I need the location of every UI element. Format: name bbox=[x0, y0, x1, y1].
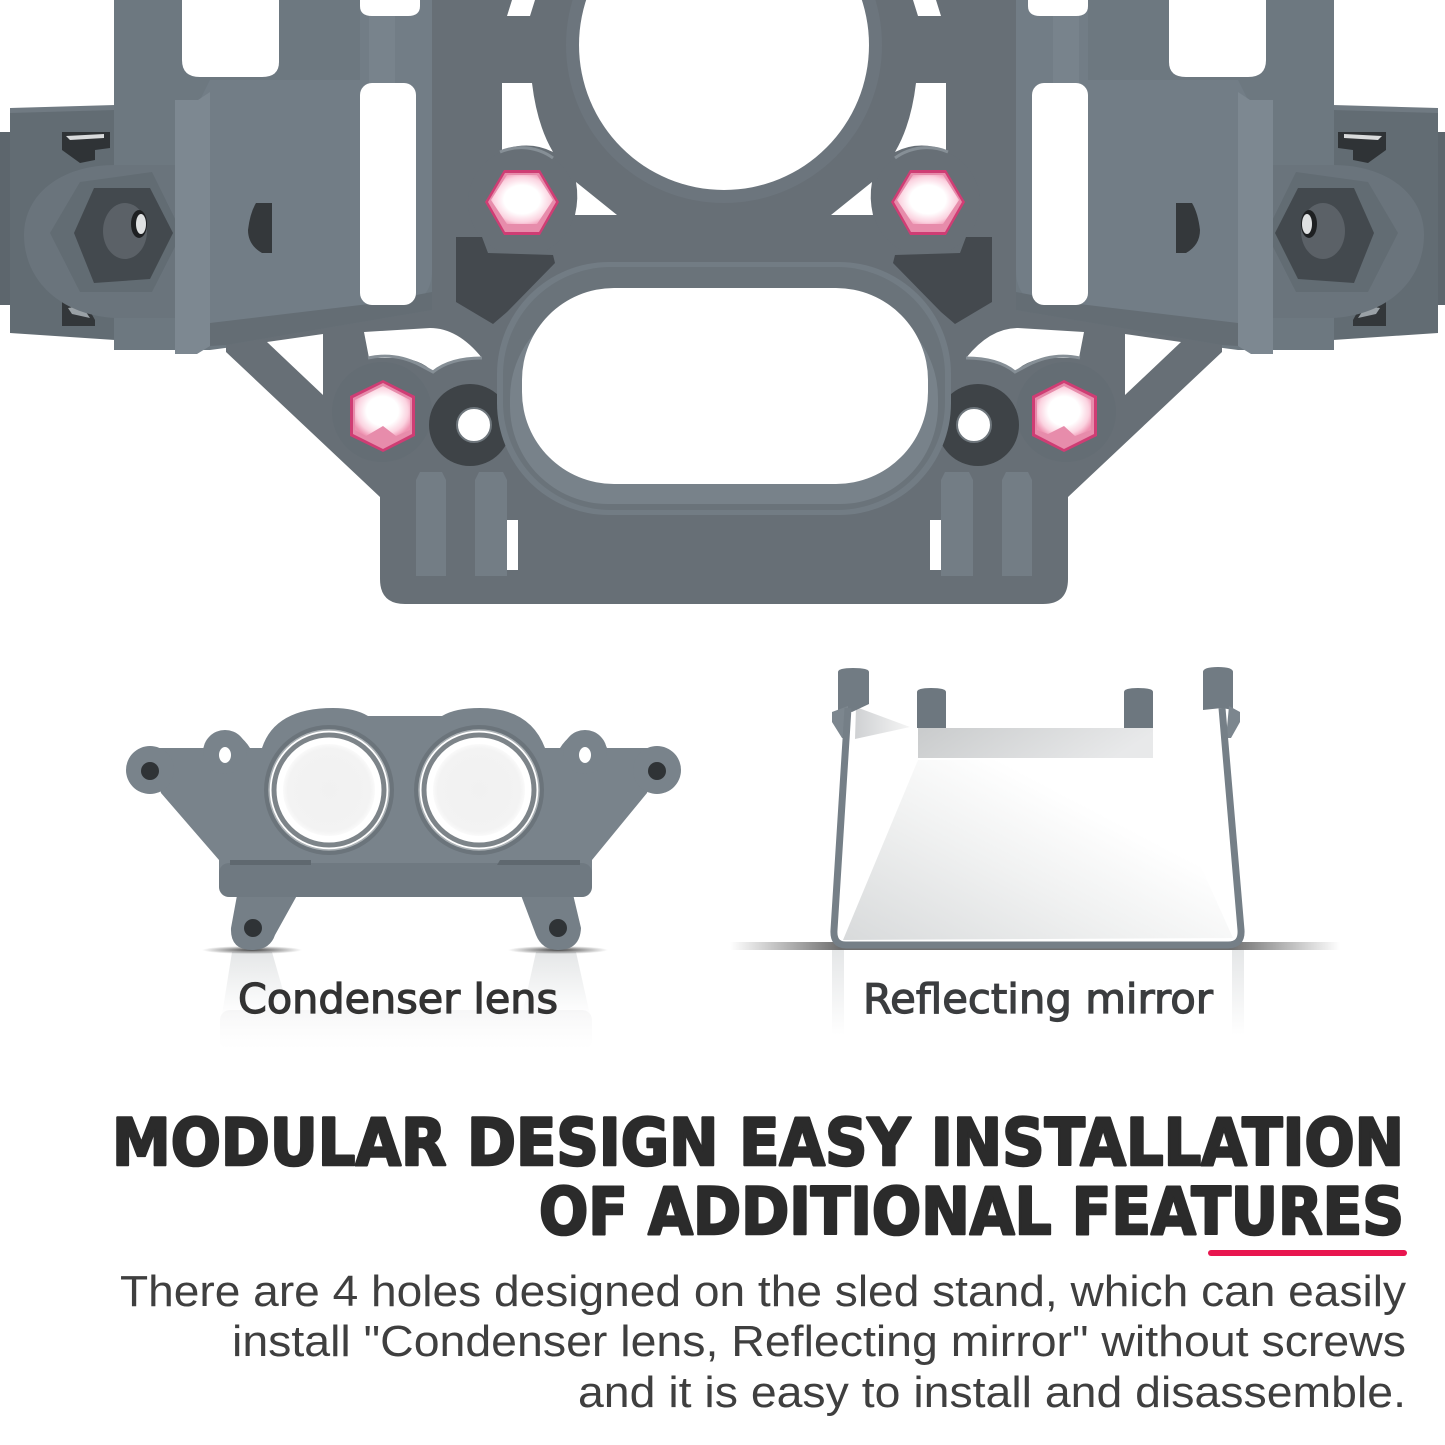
lower triangular window bbox=[267, 334, 323, 395]
glowing hole: upper left bbox=[485, 170, 559, 235]
glowing hole: lower left bbox=[350, 380, 415, 452]
bracket panel bbox=[200, 0, 432, 328]
glint bbox=[855, 707, 910, 739]
caption: reflecting mirror: Reflecting mirror bbox=[863, 975, 1213, 1023]
central lens opening bbox=[566, 0, 882, 203]
upper arc window bbox=[502, 83, 553, 152]
clip tabs bbox=[416, 472, 518, 576]
main plate half bbox=[226, 0, 724, 604]
feet bbox=[231, 890, 581, 950]
body text: There are 4 holes designed on the sled stand, which can easily bbox=[120, 1267, 1406, 1316]
reflecting mirror module bbox=[730, 667, 1340, 1035]
small triangle window bbox=[575, 182, 617, 215]
reflection bbox=[220, 952, 592, 1050]
mirror reflection bbox=[843, 760, 1233, 940]
outer column bbox=[114, 0, 436, 350]
top window bbox=[182, 0, 279, 77]
side ears bbox=[126, 730, 681, 794]
panel shaded fold bbox=[369, 0, 395, 310]
screw recess bbox=[429, 384, 511, 466]
right lens bbox=[414, 725, 544, 855]
tall slot bbox=[360, 83, 416, 305]
boss ring around lower hex bbox=[332, 362, 432, 462]
posts bbox=[832, 667, 1240, 738]
dark corner pocket bbox=[456, 237, 555, 324]
lower curved window bbox=[364, 328, 482, 372]
top triangular opening bbox=[507, 0, 535, 16]
bar bbox=[219, 863, 592, 897]
sled stand: left half bbox=[0, 0, 724, 604]
boss ring around upper hex bbox=[468, 148, 576, 256]
small top window bbox=[360, 0, 420, 16]
left lens bbox=[264, 725, 394, 855]
title bbox=[112, 1106, 1404, 1250]
panel fastener slot bbox=[248, 203, 272, 253]
condenser lens module bbox=[126, 708, 681, 1050]
body text: install "Condenser lens, Reflecting mirror" without screws bbox=[232, 1317, 1406, 1366]
side mount box bbox=[0, 105, 115, 340]
body text: and it is easy to install and disassemble. bbox=[578, 1368, 1406, 1417]
glowing hole: lower right bbox=[1032, 380, 1097, 452]
nut boss bbox=[24, 165, 182, 318]
bracket body bbox=[150, 708, 660, 880]
ground shadows bbox=[202, 946, 608, 954]
body text bbox=[120, 1267, 1406, 1417]
ground shadow bbox=[730, 942, 1340, 950]
mirror top bar bbox=[918, 728, 1153, 758]
wire frame bbox=[834, 708, 1241, 945]
reflection bbox=[832, 950, 1244, 1035]
boss highlight bbox=[368, 356, 482, 372]
bracket flange bbox=[175, 92, 432, 354]
caption: condenser lens: Condenser lens bbox=[238, 975, 558, 1023]
glowing hole: upper right bbox=[891, 170, 965, 235]
sled stand: right half bbox=[724, 0, 1445, 604]
bar shadow slots bbox=[230, 860, 580, 865]
red accent underline bbox=[1208, 1250, 1407, 1256]
oblong opening bbox=[497, 262, 951, 515]
boss top highlight bbox=[500, 148, 553, 158]
